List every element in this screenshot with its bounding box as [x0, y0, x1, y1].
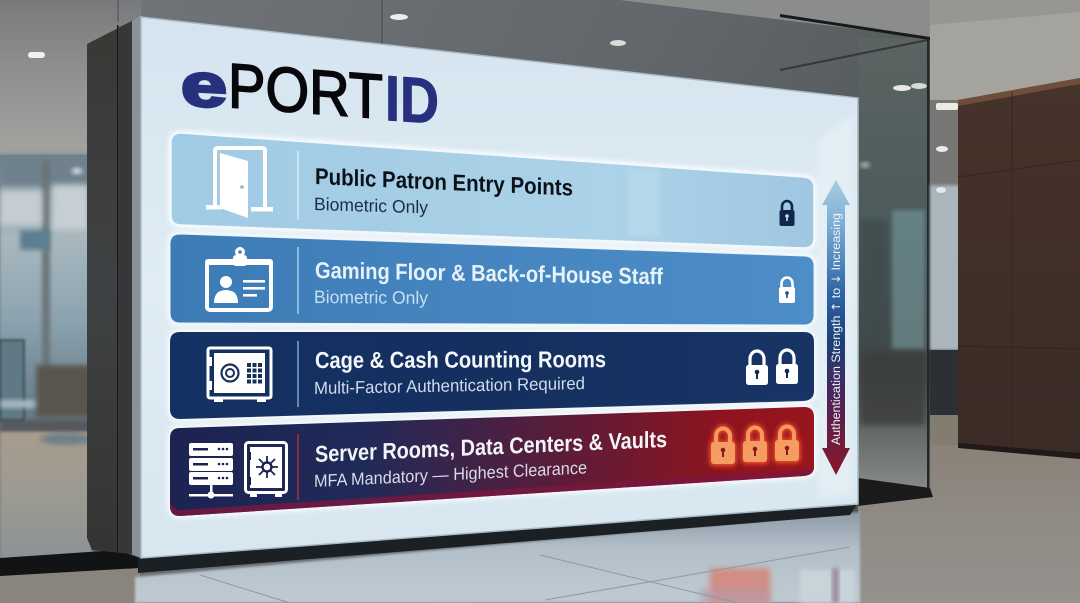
background: corridor and wood wall	[930, 0, 1080, 459]
icon: servers and vault	[189, 442, 286, 498]
icon: lock	[780, 201, 794, 226]
background: floor	[0, 440, 1080, 603]
logo	[181, 50, 439, 137]
background: glass room right of sign	[780, 14, 933, 506]
subtext: biometric only: Biometric Only	[314, 287, 428, 308]
heading: cage and cash: Cage & Cash Counting Rooms	[315, 346, 606, 373]
subtext: mfa mandatory: MFA Mandatory — Highest Clearance	[314, 457, 587, 491]
icon: lock	[779, 278, 795, 303]
arrow: authentication strength	[822, 180, 850, 475]
sign panel	[141, 17, 858, 558]
sign base	[138, 503, 858, 573]
heading: gaming floor: Gaming Floor & Back-of-House Staff	[315, 257, 663, 289]
icon: safe	[207, 348, 271, 402]
background: left window view	[0, 155, 92, 560]
panel: cage and cash counting rooms	[170, 332, 814, 419]
panel: gaming floor and back-of-house staff	[170, 234, 814, 325]
logo: e: e	[181, 50, 227, 120]
logo: ID: ID	[385, 62, 439, 137]
icon: door	[206, 148, 273, 218]
sign side column	[87, 15, 141, 558]
label: axis text: Authentication Strength ↑ to ↓ Increasing	[829, 213, 843, 445]
icon: id badge	[205, 247, 273, 310]
logo: PORT: PORT	[228, 51, 383, 133]
subtext: mfa required: Multi-Factor Authentication Required	[314, 373, 585, 398]
heading: public patron: Public Patron Entry Points	[315, 163, 573, 201]
heading: server rooms: Server Rooms, Data Centers & Vaults	[315, 426, 667, 467]
subtext: biometric only: Biometric Only	[314, 194, 428, 217]
icon: three glowing locks	[710, 426, 800, 465]
ceiling lights	[28, 14, 626, 58]
icon: two locks	[746, 350, 798, 385]
panel: public patron entry points	[171, 133, 814, 248]
panel: server rooms, data centers and vaults	[170, 407, 814, 516]
